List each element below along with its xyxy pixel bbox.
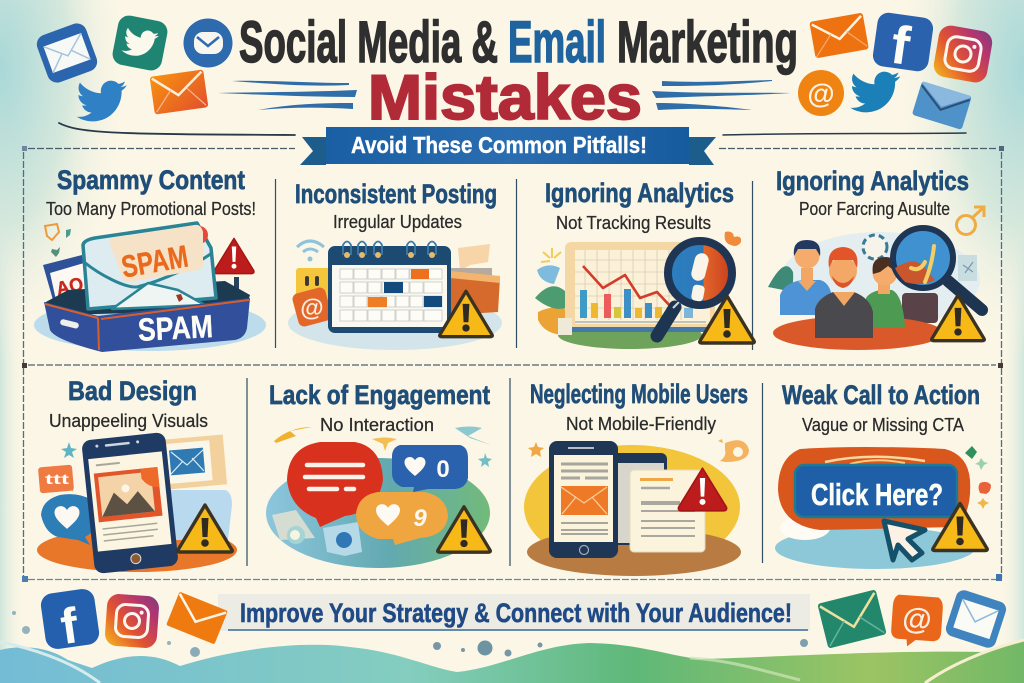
subheading: no interaction: No Interaction: [320, 415, 434, 435]
panel dividers: [247, 179, 762, 566]
icon: orange envelope left: [150, 69, 208, 115]
title: [239, 10, 798, 133]
dashed frame: [24, 148, 1002, 580]
icon: blue envelope right: [912, 81, 972, 130]
illustration: phone and documents: [524, 439, 749, 576]
icon: warning sign: [932, 295, 984, 341]
icon: blue twitter bird: [77, 81, 127, 121]
subheading: not tracking results: Not Tracking Results: [556, 213, 711, 233]
heading: ignoring analytics: Ignoring Analytics: [776, 166, 969, 196]
icon: blue circle mail: [184, 18, 232, 68]
illustration: phone and chat bubbles: ttt: [45, 471, 70, 487]
bottom hills: [0, 611, 1024, 683]
heading: inconsistent posting: Inconsistent Posting: [295, 179, 497, 209]
illustration: chat bubbles: [266, 426, 492, 568]
icon: at sign circle: @: [807, 78, 835, 109]
subheading: too many promotional posts: Too Many Promotional Posts!: [46, 199, 256, 219]
icon: teal twitter bird: [850, 72, 900, 112]
illustration: team and magnifier: [768, 228, 982, 350]
icon: green envelope footer: [817, 589, 887, 649]
heading: bad design: Bad Design: [68, 376, 197, 406]
illustration: calendar: [288, 241, 502, 350]
title: Marketing: [617, 10, 798, 75]
heading: neglecting mobile users: Neglecting Mobile Users: [530, 379, 748, 409]
icon: facebook badge: [871, 11, 934, 80]
panel: spammy content: [34, 165, 266, 352]
illustration: call to action button: Click Here?: [811, 477, 943, 512]
subheading: irregular updates: Irregular Updates: [333, 212, 462, 232]
icon: warning sign: [178, 505, 232, 552]
banner: Avoid These Common Pitfalls!: [351, 132, 647, 158]
speed lines right: [652, 80, 790, 110]
illustration: spam tray and envelope: SPAM: [137, 308, 214, 348]
subheading: not mobile-friendly: Not Mobile-Friendly: [566, 414, 716, 434]
subheading: unappealing visuals: Unappeeling Visuals: [49, 411, 208, 431]
icon: male symbol: [956, 207, 984, 234]
illustration: chat bubbles: 0: [436, 456, 450, 483]
heading: ignoring analytics: Ignoring Analytics: [545, 178, 734, 208]
icon: warning sign: [440, 291, 492, 337]
icon: orange envelope footer: [166, 592, 228, 644]
icon: blue mail footer: [944, 588, 1008, 650]
icon: green twitter badge: [111, 14, 169, 72]
title: Mistakes: [368, 63, 642, 133]
subheading: poor tracking: Poor Farcring Ausulte: [799, 199, 950, 219]
panel: weak call to action: [775, 380, 991, 569]
swoosh underlines: [59, 123, 966, 135]
footer banner: Improve Your Strategy & Connect with Your Audience!: [240, 598, 792, 628]
speed lines left: [218, 81, 357, 110]
banner: [300, 127, 716, 165]
icon: facebook footer: f: [57, 597, 82, 655]
subheading: vague or missing cta: Vague or Missing CTA: [802, 415, 964, 435]
illustration: spam tray and envelope: [34, 223, 266, 352]
icon: warning sign: [438, 507, 490, 552]
frame corners: [22, 146, 1004, 582]
icon: facebook badge: f: [887, 15, 915, 77]
heading: spammy content: Spammy Content: [57, 165, 245, 195]
panel: inconsistent posting: [288, 179, 502, 350]
footer banner: [218, 594, 810, 631]
illustration: chart and magnifier: [535, 232, 741, 349]
panel: neglecting mobile users: [524, 379, 749, 576]
illustration: calendar: @: [300, 295, 324, 322]
icon: decorative shapes: [45, 224, 71, 257]
icon: orange at bubble footer: @: [901, 602, 933, 637]
icon: orange envelope right: [809, 13, 869, 58]
panel: poor tracking: [768, 166, 984, 350]
title: Social Media &: [239, 10, 498, 75]
icon: instagram footer: [104, 593, 160, 649]
icon: warning sign: [700, 296, 754, 343]
panel: lack of engagement: [266, 380, 492, 568]
title: Email: [508, 10, 606, 75]
icon: instagram badge: [932, 24, 994, 84]
icon: orange at bubble footer: [890, 594, 944, 649]
icon: warning sign: [933, 504, 987, 550]
illustration: spam tray and envelope: AO: [55, 274, 85, 300]
illustration: spam tray and envelope: SPAM: [119, 239, 191, 285]
heading: lack of engagement: Lack of Engagement: [269, 380, 490, 410]
illustration: chat bubbles: 9: [413, 505, 427, 532]
icon: blue mail badge: [34, 21, 100, 85]
illustration: call to action button: [775, 446, 991, 569]
panel: ignoring analytics: [535, 178, 754, 349]
icon: at sign circle: [798, 70, 844, 116]
icon: facebook footer: [39, 588, 102, 657]
panel: bad design: [37, 376, 237, 574]
icon: warning sign red: [678, 468, 727, 511]
illustration: phone and chat bubbles: [37, 432, 237, 574]
